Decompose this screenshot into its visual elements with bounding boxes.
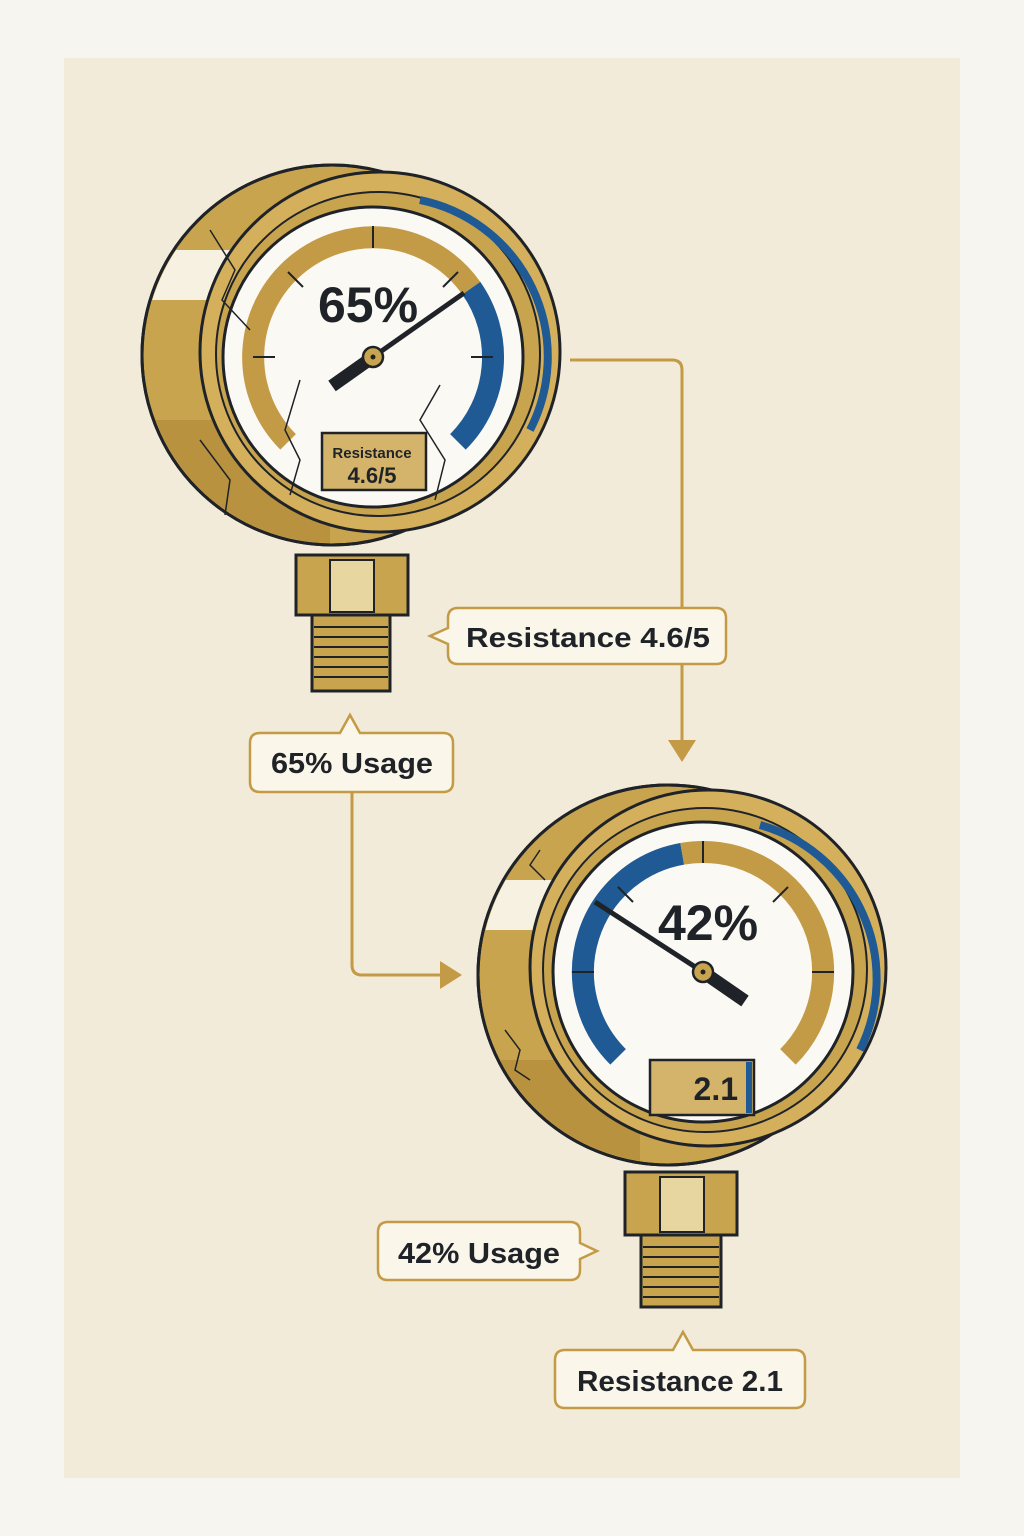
gauge 2 [470, 785, 886, 1307]
label: Resistance 4.6/5 [430, 608, 726, 664]
label: 65% Usage [250, 715, 453, 792]
gauge 1 value: 65% [318, 277, 418, 333]
label: 42% Usage: 42% Usage [398, 1238, 560, 1270]
gauge 2 display: 2.1 [694, 1071, 738, 1107]
gauge 1 display: Resistance [332, 445, 412, 462]
gauge 1 needle [332, 293, 464, 386]
label: 42% Usage [378, 1222, 597, 1280]
arrow: usage label to gauge 2 [352, 792, 462, 989]
gauge 1 [130, 165, 560, 691]
label: Resistance 4.6/5: Resistance 4.6/5 [466, 622, 710, 653]
gauge 1 stem [296, 555, 408, 691]
gauge 2 needle [595, 902, 745, 1001]
gauge 1 display: 4.6/5 [348, 463, 396, 488]
gauge 2 stem [625, 1172, 737, 1307]
gauge 2 value: 42% [658, 895, 758, 951]
label: 65% Usage: 65% Usage [271, 748, 433, 780]
gauge 2 display [650, 1060, 754, 1115]
gauge 2 body [470, 785, 886, 1180]
label: Resistance 2.1 [555, 1332, 805, 1408]
gauge 1 display [322, 433, 426, 490]
label: Resistance 2.1: Resistance 2.1 [577, 1366, 783, 1398]
arrow: gauge 1 to gauge 2 [570, 360, 696, 762]
gauge 1 body [130, 165, 560, 560]
